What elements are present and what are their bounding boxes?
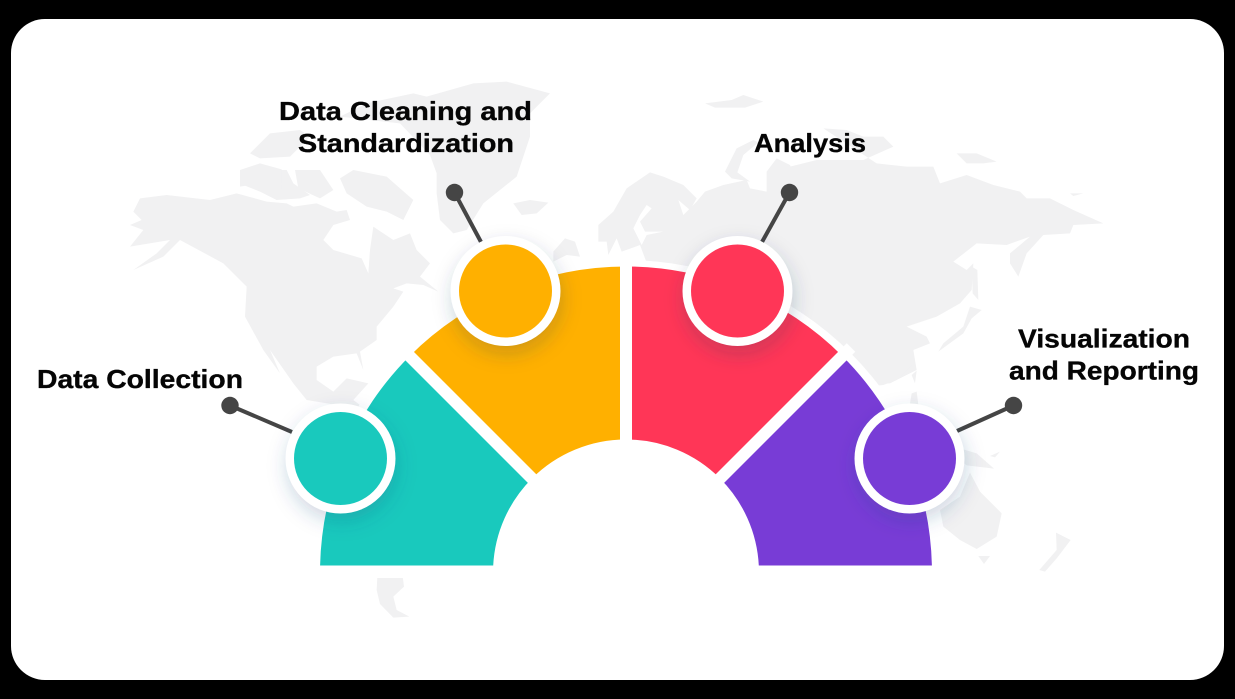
node: data collection [286, 404, 396, 520]
segment: visualization [720, 356, 932, 566]
map: Arctic islands, Greenland and Iceland [240, 82, 550, 233]
map: Asia [760, 128, 1103, 383]
white halo around semicircle [308, 260, 944, 578]
connector: data cleaning [446, 184, 481, 242]
world map background [130, 82, 1103, 618]
label: data cleaning and standardization: Data Cleaning and [279, 96, 532, 126]
node: visualization [854, 404, 965, 520]
node: analysis [682, 236, 793, 353]
label: visualization and reporting [1009, 324, 1199, 386]
label: data collection: Data Collection [37, 364, 243, 394]
segment gaps [401, 255, 851, 488]
map: North America [130, 170, 438, 410]
connector: data collection [221, 397, 292, 432]
node: data cleaning [450, 236, 561, 353]
map: South America tip [377, 577, 409, 618]
semicircle chart [320, 255, 932, 566]
segment: analysis [626, 266, 842, 478]
label: visualization and reporting: and Reporting [1009, 356, 1199, 386]
map: Southeast Asia, Australia and New Zealand [857, 350, 1071, 572]
connector: analysis [762, 184, 798, 242]
map: Europe [553, 95, 817, 272]
label: data cleaning and standardization: Standardization [298, 128, 514, 158]
connector: visualization [957, 397, 1022, 431]
label: data cleaning and standardization [279, 96, 532, 158]
label: analysis: Analysis [754, 128, 866, 158]
label: visualization and reporting: Visualization [1018, 324, 1190, 354]
segment: data collection [320, 356, 532, 566]
segment: data cleaning [410, 266, 626, 478]
